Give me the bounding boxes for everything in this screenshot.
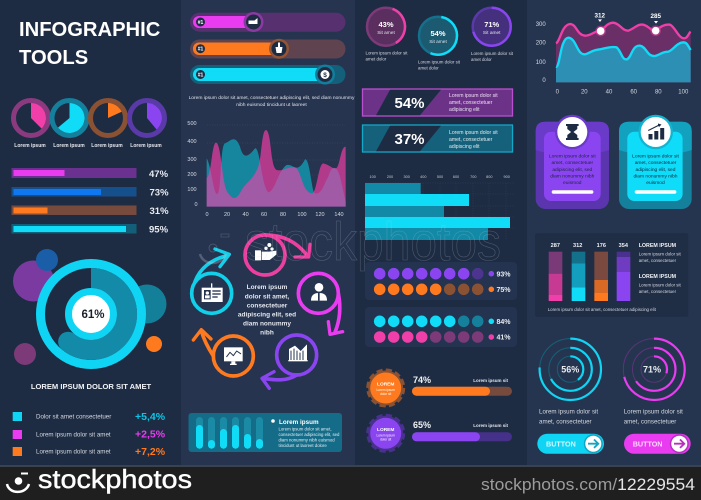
stat box: 54%: adipiscing elit [449, 107, 480, 113]
stat box: 54% [362, 89, 512, 116]
panel: teal mini bars: tincidunt ut laoreet dolore [278, 443, 327, 448]
panel: stacked bars: 176 [597, 243, 606, 249]
badge bar: 65%: Lorem ipsum [376, 433, 395, 437]
horizontal bar chart [365, 175, 515, 240]
gauge: 71% [471, 8, 514, 62]
panel: stacked bars: amet, consectetuer [639, 289, 677, 294]
badge bar: 74%: dolor sit [380, 392, 391, 396]
line area chart: 0 [542, 78, 546, 84]
progress bars [12, 168, 169, 236]
button: cyan: BUTTON [546, 440, 576, 448]
line area chart [536, 12, 691, 96]
card: cyan chart: Lorem ipsum dolor sit [632, 154, 680, 160]
line area chart: 80 [655, 90, 662, 96]
stat box: 37% [362, 125, 512, 152]
slider caption [189, 95, 355, 108]
panel: stacked bars: amet, consectetuer [639, 258, 677, 263]
slider: cyan: $ [323, 72, 327, 79]
progress bars: 73% [150, 188, 169, 198]
area chart: overlap [187, 121, 346, 218]
line area chart: 300 [536, 22, 546, 28]
panel: teal mini bars: Lorem ipsum dolor sit amet, [278, 426, 332, 432]
horizontal bar chart: 600 [453, 175, 459, 179]
pie labels: Lorem ipsum [130, 143, 162, 149]
horizontal bar chart: 700 [470, 175, 476, 179]
pie labels [14, 143, 162, 149]
card: cyan chart: euismod [646, 180, 665, 186]
slider: orange: #1 [198, 47, 203, 53]
gauge: 54%: Lorem ipsum dolor sit [418, 60, 461, 64]
slider: cyan [190, 64, 346, 84]
radial gauge: 56%: amet, consectetuer [539, 418, 592, 426]
area chart: overlap: 300 [187, 157, 197, 163]
cycle center text: adipiscing elit, sed [238, 312, 296, 319]
pie: cyan [52, 100, 87, 136]
icon: monitor [224, 347, 243, 365]
pie labels: Lorem ipsum [14, 143, 46, 149]
slider: magenta: #1 [198, 20, 203, 26]
gauge: 71%: Sit amet [483, 30, 501, 36]
cycle center text: dolor sit amet, [245, 294, 289, 300]
panel: dots cyan pink: 41% [496, 334, 511, 342]
gauge: 43%: amet dolor [366, 56, 387, 62]
stat box: 54%: Lorem ipsum dolor sit [449, 93, 498, 99]
gauge: 71%: amet dolor [471, 57, 492, 62]
icon: id card [202, 283, 223, 302]
button: magenta: BUTTON [633, 440, 663, 448]
line area chart: 312 [594, 12, 605, 20]
button: magenta [624, 434, 691, 454]
panel: stacked bars: 287 [551, 243, 560, 249]
card: cyan chart: adipiscing elit, sed [636, 167, 676, 173]
line area chart: 285 [650, 13, 661, 20]
stat box: 37%: adipiscing elit [449, 144, 480, 150]
horizontal bar chart: 300 [404, 175, 410, 179]
area chart: overlap: 140 [334, 212, 344, 218]
horizontal bar chart: 800 [486, 175, 492, 179]
cycle center text: consectetuer [247, 302, 288, 310]
cycle diagram [192, 235, 343, 388]
arrow: magenta [298, 273, 343, 334]
arrow: purple [262, 335, 317, 388]
panel: stacked bars: Lorem ipsum dolor sit [639, 252, 681, 256]
line area chart: 100 [678, 90, 689, 96]
badge bar: 74%: LOREM [377, 382, 394, 388]
line area chart: 60 [630, 90, 638, 96]
icon: bar chart [288, 344, 308, 361]
line area chart: 0 [556, 90, 560, 96]
donut chart with bubbles: 61% [81, 309, 105, 321]
badge bar: 65% [368, 416, 512, 451]
slider: magenta [190, 12, 346, 32]
badge bar: 74%: 74% [413, 375, 431, 385]
card: cyan chart: amet, consectetuer [635, 160, 677, 166]
donut chart with bubbles [13, 249, 166, 365]
legend: Lorem ipsum dolor sit amet [36, 432, 111, 438]
panel: stacked bars [535, 233, 688, 317]
radial gauge: 71%: Lorem ipsum dolor sit [624, 408, 683, 416]
area chart: overlap: 400 [187, 139, 197, 145]
cycle center text: Lorem ipsum [247, 284, 288, 291]
icon: hourglass [566, 124, 579, 140]
donut heading: LOREM IPSUM DOLOR SIT AMET [31, 382, 152, 391]
button: cyan [537, 434, 604, 454]
gauge: 43% [362, 2, 410, 62]
horizontal bar chart: 400 [420, 175, 426, 179]
card: purple hourglass: amet, consectetuer [552, 160, 593, 166]
legend: +7,2% [135, 446, 166, 458]
gauge: 43%: Sit amet [377, 30, 395, 36]
arrow: orange [193, 330, 253, 376]
area chart: overlap: 20 [224, 212, 230, 218]
pie labels: Lorem ipsum [53, 143, 85, 149]
badge bar: 65%: LOREM [377, 427, 394, 433]
card: purple hourglass: Lorem ipsum dolor sit [549, 154, 596, 160]
title: INFOGRAPHIC [19, 19, 161, 41]
gauge: 43%: Lorem ipsum dolor sit [366, 50, 408, 56]
cycle center text: diam nonummy [243, 321, 291, 328]
stat box: 37%: 37% [394, 131, 425, 148]
card: purple hourglass [536, 115, 609, 209]
title: TOOLS [19, 47, 88, 69]
panel: stacked bars: 312 [573, 243, 582, 249]
badge bar: 65%: dolor sit [380, 437, 391, 441]
legend: +5,4% [135, 411, 166, 423]
slider caption: Lorem ipsum dolor sit amet, consectetuer adipiscing elit, sed diam nonummy [189, 95, 355, 101]
watermark: stockphotos [245, 212, 501, 272]
card: purple hourglass: euismod [563, 180, 582, 186]
pie labels: Lorem ipsum [91, 143, 123, 149]
gauge: 43%: 43% [378, 20, 394, 29]
card: cyan chart [619, 115, 692, 209]
pie: orange [90, 100, 126, 136]
panel: stacked bars: Lorem ipsum dolor sit amet, consectetuer adipiscing elit [548, 307, 657, 312]
title [19, 19, 161, 69]
panel: dots cyan pink [365, 307, 517, 347]
panel: stacked bars: Lorem ipsum dolor sit [639, 282, 681, 288]
area chart: overlap: 100 [187, 187, 197, 193]
badge bar: 74%: Lorem ipsum [376, 388, 395, 392]
panel: teal mini bars: consectetuer adipiscing elit, sed [278, 432, 340, 437]
legend [13, 411, 166, 458]
area chart: overlap: 500 [187, 121, 197, 127]
card: purple hourglass: adipiscing elit, sed [552, 167, 593, 173]
panel: stacked bars: LOREM IPSUM [639, 274, 677, 280]
radial gauge: 56%: 56% [561, 364, 579, 374]
pie row [14, 100, 164, 149]
legend: Lorem ipsum dolor sit amet [36, 448, 111, 456]
cycle center text [238, 284, 296, 337]
sliders [190, 12, 346, 84]
horizontal bar chart: 100 [370, 175, 376, 179]
icon: person [311, 283, 327, 301]
area chart: overlap: 0 [205, 212, 209, 218]
panel: teal mini bars [188, 413, 342, 452]
badge bar: 74%: Lorem ipsum sit [473, 378, 508, 383]
line area chart: 20 [581, 90, 588, 96]
pie: purple [130, 100, 164, 136]
horizontal bar chart: 900 [504, 175, 510, 179]
slider: orange [190, 39, 346, 59]
icon: smile logo [7, 472, 29, 492]
area chart: overlap: 40 [243, 212, 249, 218]
panel: stacked bars: 354 [619, 243, 629, 249]
radial gauge: 71%: 71% [643, 364, 661, 374]
stat box: 54%: amet, consectetuer [449, 100, 493, 106]
panel: stacked bars: LOREM IPSUM [639, 243, 677, 249]
gauge: 54%: amet dolor [418, 66, 439, 70]
progress bars: 47% [149, 169, 169, 180]
arrow: cyan [192, 249, 232, 313]
area chart: overlap: 80 [280, 212, 286, 218]
card: cyan chart: diam nonummy nibh [633, 174, 678, 180]
area chart: overlap: 120 [315, 212, 325, 218]
area chart: overlap: 0 [194, 202, 198, 208]
horizontal bar chart: 500 [437, 175, 443, 179]
progress bars: 95% [149, 224, 169, 236]
footer url: stockphotos.com/ 12229554 [481, 476, 695, 494]
icon: rising bars [648, 124, 664, 140]
horizontal bar chart: 200 [387, 175, 393, 179]
stat box: 37%: Lorem ipsum dolor sit [449, 130, 498, 136]
panel: dots purple orange [365, 262, 517, 300]
slider: cyan: #1 [198, 72, 203, 78]
gauge: 71%: Lorem ipsum dolor sit [471, 51, 514, 56]
area chart: overlap: 200 [187, 172, 197, 178]
panel: dots cyan pink: 84% [496, 319, 511, 326]
panel: teal mini bars: diam nonummy nibh euismod [278, 438, 335, 442]
line area chart: 100 [536, 60, 546, 66]
badge bar: 65%: Lorem ipsum sit [473, 423, 508, 428]
stat box: 37%: amet, consectetuer [449, 137, 493, 143]
badge bar: 74% [368, 370, 512, 406]
footer logo text: stockphotos [38, 464, 192, 494]
panel: dots purple orange: 93% [496, 272, 511, 278]
area chart: overlap: 60 [261, 212, 267, 218]
gauge: 71%: 71% [484, 20, 500, 29]
legend: +2,5% [135, 428, 166, 440]
radial gauge: 56%: Lorem ipsum dolor sit [539, 408, 598, 416]
gauge: 54% [416, 14, 461, 70]
radial gauge: 71%: amet, consectetuer [624, 418, 676, 426]
badge bar: 65%: 65% [413, 420, 431, 430]
card: purple hourglass: diam nonummy nibh [550, 174, 595, 180]
area chart: overlap: 100 [297, 212, 307, 218]
footer bar [0, 464, 701, 500]
panel: dots purple orange: 75% [496, 287, 511, 294]
slider caption: nibh euismod tincidunt ut laoreet [236, 102, 307, 108]
gauge: 54%: 54% [430, 29, 446, 38]
line area chart: 40 [606, 90, 613, 96]
line area chart: 200 [536, 40, 546, 46]
panel: teal mini bars: Lorem ipsum [279, 419, 319, 426]
radial gauge: 71% [623, 339, 685, 426]
icon: hand with coins [255, 243, 276, 260]
cycle center text: nibh [260, 330, 274, 337]
stat box: 54%: 54% [394, 95, 425, 112]
legend: Dolor sit amet consectetuer [36, 414, 111, 420]
radial gauge: 56% [539, 339, 601, 426]
arrow: pink [245, 235, 310, 275]
pie: pink [14, 100, 48, 136]
progress bars: 31% [150, 206, 169, 217]
gauge: 54%: Sit amet [429, 39, 447, 45]
